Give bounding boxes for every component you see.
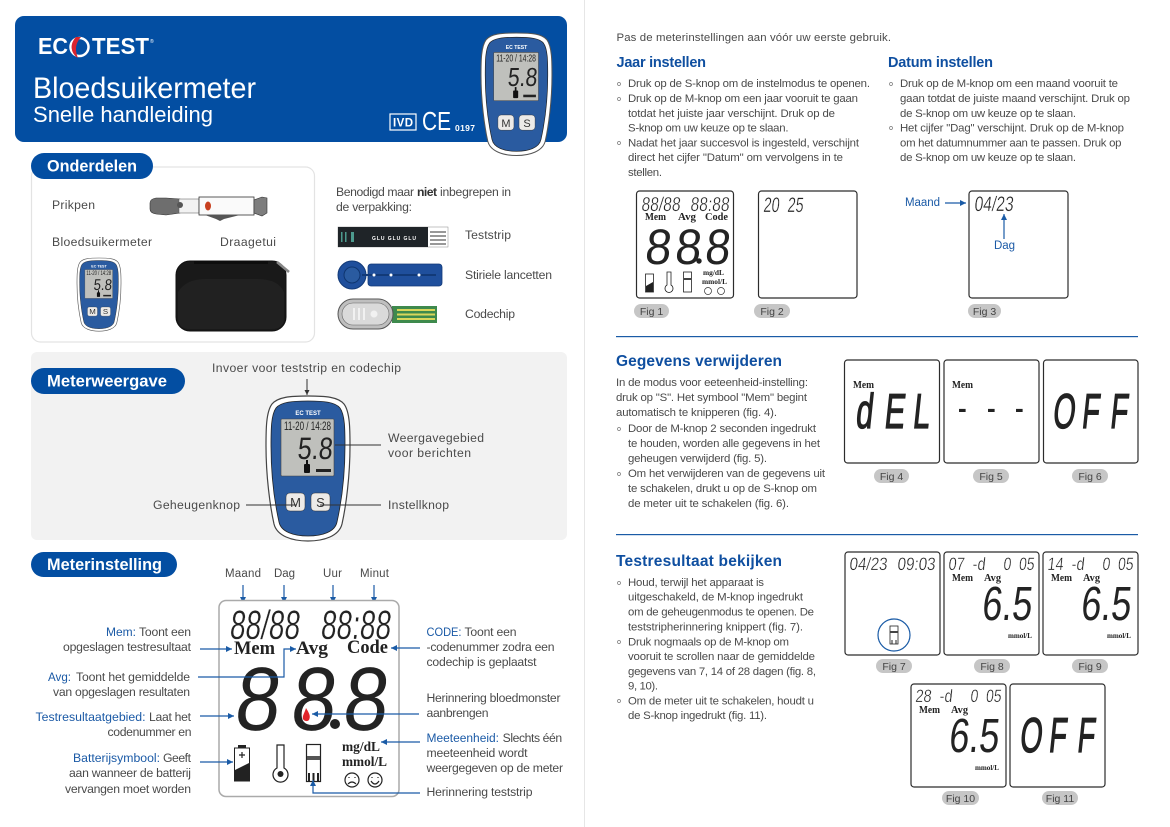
callout: meeteenheid: Slechts één: [503, 731, 562, 745]
meter illustration: EC TEST: [295, 411, 321, 417]
callout: batterijsymbool: vervangen moet worden: [65, 782, 191, 796]
figure 6: [1044, 360, 1138, 463]
icon: battery: [234, 745, 250, 781]
label: bloedsuikermeter: Bloedsuikermeter: [52, 235, 152, 249]
bullets: 9, 10).: [628, 680, 658, 692]
bullets: Druk nogmaals op de M-knop om: [628, 636, 789, 648]
paragraph: automatisch te knipperen (fig. 4).: [616, 407, 777, 419]
bullets: [618, 577, 816, 722]
bullets: datum instellen: Druk op de M-knop om een maand vooruit te: [900, 78, 1118, 90]
figure 4 label: [874, 469, 909, 483]
LCD units: mmol/L: [342, 754, 387, 769]
bullets: te schakelen, drukt u op de S-knop om: [628, 483, 817, 495]
callout: teststrip reminder: Herinnering teststrip: [426, 785, 533, 799]
meter illustration: [77, 258, 121, 331]
figure 9: Avg: [1083, 573, 1101, 584]
IVD mark: [390, 114, 416, 130]
callout: weergavegebied: [335, 431, 484, 460]
figure 6 label: [1072, 469, 1108, 483]
bullets: [618, 423, 826, 510]
figure 8 label: [974, 659, 1010, 673]
callout: meeteenheid: Meeteenheid:: [426, 731, 499, 745]
labels: date and time: Minut: [360, 568, 390, 580]
paragraph: In de modus voor eeteenheid-instelling:: [616, 377, 808, 389]
not-included intro text: inbegrepen in: [440, 185, 511, 199]
figure 8: 07 -d: [948, 554, 987, 574]
figure 5: ---: [958, 393, 1024, 423]
callout: avg: van opgeslagen resultaten: [53, 685, 190, 699]
bullets: jaar instellen: Druk op de S-knop om de instelmodus te openen.: [628, 78, 870, 90]
figure 7: 09:03: [897, 554, 937, 574]
icon: blood drop: [303, 708, 310, 721]
heading pill: meterweergave: [31, 368, 185, 394]
figure 4: dEL: [854, 384, 934, 439]
figure 4 label: Fig 4: [880, 471, 903, 483]
meter illustration: [266, 396, 350, 541]
figure 10: Avg: [951, 705, 969, 716]
label: strip port: Invoer voor teststrip en codechip: [212, 361, 401, 375]
LCD display diagram: [219, 600, 399, 796]
figure 1: Code: [705, 212, 728, 223]
callout: bloedmonster: aanbrengen: [426, 706, 488, 720]
figure 5 label: Fig 5: [979, 471, 1003, 483]
bullets: jaar instellen: totdat het juiste jaar verschijnt. Druk op de: [628, 108, 835, 120]
meter illustration: S: [103, 307, 108, 316]
bullets: de S-knop ingedrukt (fig. 11).: [628, 710, 767, 722]
figure 3: [969, 191, 1068, 298]
meter illustration: 5.8: [507, 62, 539, 92]
bullets: geheugen verwijderd (fig. 5).: [628, 453, 767, 465]
panel: meterweergave: [31, 352, 567, 541]
bullets: vooruit te scrollen naar de gemiddelde: [628, 651, 815, 663]
icon: lancets: [338, 261, 442, 289]
meter illustration: 11-20 / 14:28: [496, 54, 536, 65]
meter illustration: S: [316, 495, 325, 510]
figure 3: 04/23: [973, 193, 1015, 216]
bullets: datum instellen: de S-knop om uw keuze op te slaan.: [900, 152, 1076, 164]
labels: date and time: Maand: [225, 568, 261, 580]
icon: test strip reminder: [306, 744, 320, 782]
arrow: strip port: [306, 379, 308, 395]
logo: EC: [38, 33, 68, 59]
icon: code chip: [338, 299, 437, 329]
callout: batterijsymbool: [65, 751, 233, 796]
bullets: te houden, worden alle gegevens in het: [628, 438, 821, 450]
meter illustration: S: [523, 118, 531, 130]
figure 8: mmol/L: [1008, 632, 1032, 640]
figure 10: 6.5: [947, 709, 1003, 763]
figure 1: 88:88: [689, 194, 731, 216]
header banner: [15, 16, 567, 156]
callout: testresultaatgebied: Testresultaatgebied:: [36, 710, 146, 724]
logo: ®: [150, 38, 154, 45]
bullets: uitgeschakeld, de M-knop ingedrukt: [628, 592, 804, 604]
figure 8 label: Fig 8: [980, 661, 1004, 673]
icon: test strip: GLU GLU GLU: [372, 236, 416, 242]
LCD big digit: 8: [287, 649, 342, 750]
callout: weergavegebied: voor berichten: [388, 446, 471, 460]
callout: instellknop: Instellknop: [388, 498, 449, 512]
bullets: om de geheugenmodus te openen. De: [628, 606, 814, 618]
figure 9: [1043, 552, 1138, 655]
bullets: jaar instellen: direct het cijfer "Datum" om vervolgens in te: [628, 152, 843, 164]
meter illustration: EC TEST: [91, 265, 108, 269]
label: draagetui: Draagetui: [220, 235, 276, 249]
icon: test strip: [338, 227, 448, 247]
logo: TEST: [92, 33, 149, 59]
figure 7: 04/23: [849, 554, 889, 574]
section: meterinstelling: [31, 552, 563, 799]
callout: testresultaatgebied: codenummer en: [108, 725, 192, 739]
CE mark: 0197: [455, 123, 475, 133]
meter illustration: M: [290, 495, 301, 510]
figure 9: 0 05: [1102, 554, 1135, 574]
not-included intro text: niet: [417, 185, 437, 199]
bullets: datum instellen: gaan totdat de juiste maand verschijnt. Druk op: [900, 93, 1130, 105]
heading pill: meterinstelling: [31, 552, 177, 577]
callout: code: -codenummer zodra een: [426, 640, 554, 654]
figure 10: 28 -d: [915, 686, 954, 706]
callout: dag: Dag: [994, 240, 1015, 252]
figure 1: 8: [673, 219, 705, 275]
callout: bloedmonster: [312, 691, 560, 720]
bullets: jaar instellen: Druk op de M-knop om een jaar vooruit te gaan: [628, 93, 858, 105]
figure 11: OFF: [1018, 708, 1098, 763]
icon: carrying case: [176, 261, 289, 331]
section: jaar instellen: [616, 55, 870, 179]
bullets: Houd, terwijl het apparaat is: [628, 577, 764, 589]
figure 10 label: Fig 10: [946, 793, 975, 805]
bullets: de meter uit te schakelen (fig. 6).: [628, 498, 789, 510]
meter illustration: 5.8: [93, 277, 113, 294]
figure 9: Mem: [1051, 573, 1072, 584]
meter illustration: EC TEST: [506, 45, 528, 51]
CE mark: [422, 106, 475, 136]
callout: instellknop: [320, 498, 449, 512]
callout: meeteenheid: meeteenheid wordt: [426, 746, 528, 760]
figure 4: [844, 360, 940, 463]
figure 9 label: Fig 9: [1078, 661, 1102, 673]
callout: geheugenknop: Geheugenknop: [153, 498, 240, 512]
LCD word: Avg: Avg: [296, 638, 329, 659]
subtitle: Snelle handleiding: [33, 102, 213, 127]
figure 1: [636, 191, 734, 298]
figure 4: Mem: [853, 380, 874, 391]
figure 8: 6.5: [980, 577, 1036, 631]
heading pill: onderdelen: [31, 153, 153, 179]
LCD units: mg/dL: [342, 739, 380, 754]
figure 6: OFF: [1051, 384, 1131, 439]
paragraph: druk op "S". Het symbool "Mem" begint: [616, 392, 808, 404]
figure 3 label: Fig 3: [973, 306, 996, 318]
icon: sad and happy faces: [345, 773, 382, 787]
not-included intro text: Benodigd maar: [336, 185, 414, 199]
labels: date and time: Dag: [274, 568, 295, 580]
heading: testresultaat bekijken: Testresultaat bekijken: [616, 553, 782, 570]
heading: jaar instellen: Jaar instellen: [616, 55, 706, 71]
heading: datum instellen: Datum instellen: [888, 55, 993, 71]
callout: mem: [63, 625, 232, 654]
LCD units: [342, 739, 387, 769]
bullets: jaar instellen: [618, 78, 870, 179]
figure 8: Mem: [952, 573, 973, 584]
meter illustration: 5.8: [296, 431, 334, 466]
intro sentence: Pas de meterinstellingen aan vóór uw eerste gebruik.: [616, 32, 891, 44]
meter illustration: [481, 33, 552, 156]
logo: [38, 33, 154, 59]
figure 2: [758, 191, 857, 298]
bullets: datum instellen: Het cijfer "Dag" verschijnt. Druk op de M-knop: [900, 122, 1124, 134]
meter illustration: 11-20 / 14:28: [86, 270, 111, 277]
section: testresultaat bekijken: [616, 553, 816, 722]
callout: testresultaatgebied: [36, 710, 234, 739]
callout: avg: [48, 649, 296, 699]
figure 7 label: Fig 7: [882, 661, 906, 673]
figure 6 label: Fig 6: [1078, 471, 1102, 483]
bullets: Om het verwijderen van de gegevens uit: [628, 468, 826, 480]
bullets: datum instellen: [890, 78, 1130, 164]
labels: date and time: Uur: [323, 568, 342, 580]
figure 2 label: [754, 304, 790, 318]
figure 2: 20 25: [762, 194, 805, 217]
meter illustration: M: [89, 307, 96, 316]
figure 1: Avg: [678, 212, 697, 223]
callout: testresultaatgebied: Laat het: [149, 710, 192, 724]
figure 5 label: [973, 469, 1009, 483]
bullets: gegevens van 7, 14 of 28 dagen (fig. 8,: [628, 666, 816, 678]
LCD date digits: 88/88: [228, 602, 303, 648]
LCD word: Code: Code: [347, 637, 388, 658]
callout: weergavegebied: Weergavegebied: [388, 431, 484, 445]
callout: code: CODE:: [426, 625, 462, 639]
bullets: Om de meter uit te schakelen, houdt u: [628, 696, 814, 708]
figure 9 label: [1072, 659, 1108, 673]
callout: avg: Toont het gemiddelde: [76, 670, 190, 684]
labels: date and time: [225, 568, 390, 603]
callout: batterijsymbool: Batterijsymbool:: [73, 751, 160, 765]
IVD mark: IVD: [393, 118, 413, 130]
not-included intro text: de verpakking:: [336, 200, 412, 214]
figure 11: [1010, 684, 1105, 787]
figure 10: mmol/L: [975, 764, 999, 772]
not-included intro text: [336, 185, 511, 214]
section: datum instellen: [888, 55, 1130, 164]
figure 1 label: Fig 1: [640, 306, 663, 318]
heading pill: onderdelen: Onderdelen: [47, 156, 137, 176]
LCD big digit: 8: [231, 649, 286, 750]
label: prikpen: Prikpen: [52, 198, 95, 212]
bullets: jaar instellen: stellen.: [628, 167, 662, 179]
figure 5: Mem: [952, 380, 973, 391]
figure 7: [845, 552, 940, 655]
heading pill: meterinstelling: Meterinstelling: [47, 555, 162, 574]
callout: mem: Mem:: [106, 625, 136, 639]
LCD time digits: 88:88: [319, 602, 394, 648]
callout: dag: [994, 214, 1015, 252]
paragraph: [616, 377, 808, 419]
figure 9: 14 -d: [1047, 554, 1086, 574]
heading pill: meterweergave: Meterweergave: [47, 372, 167, 390]
title: Bloedsuikermeter: [33, 72, 256, 105]
LCD word: Mem: Mem: [234, 638, 275, 659]
callout: maand: [905, 197, 966, 209]
figure 3 label: [968, 304, 1001, 318]
LCD decimal point: [330, 719, 340, 729]
label: teststrip: Teststrip: [465, 228, 511, 242]
bullets: Door de M-knop 2 seconden ingedrukt: [628, 423, 817, 435]
label: codechip: Codechip: [465, 307, 515, 321]
figure 1: 8: [643, 219, 675, 275]
bullets: jaar instellen: S-knop om uw keuze op te slaan.: [628, 122, 788, 134]
bullets: teststripherinnering knippert (fig. 7).: [628, 622, 803, 634]
figure 8: [944, 552, 1039, 655]
callout: meeteenheid: weergegeven op de meter: [426, 761, 563, 775]
figure 1 label: [634, 304, 669, 318]
figure 10: Mem: [919, 705, 940, 716]
bullets: jaar instellen: Nadat het jaar succesvol is ingesteld, verschijnt: [628, 138, 860, 150]
callout: mem: opgeslagen testresultaat: [63, 640, 192, 654]
figure 1: 88/88: [640, 194, 682, 216]
figure 10: [911, 684, 1006, 787]
heading: gegevens verwijderen: Gegevens verwijderen: [616, 353, 782, 370]
bullets: datum instellen: de S-knop om uw keuze op te slaan.: [900, 108, 1076, 120]
figure 1: Mem: [645, 212, 666, 223]
callout: mem: Toont een: [139, 625, 191, 639]
LCD big digit: 8: [339, 649, 394, 750]
callout: batterijsymbool: Geeft: [163, 751, 192, 765]
figure 1: mmol/L: [702, 277, 727, 286]
callout: code: [391, 625, 554, 669]
icon: lancing device: [150, 197, 267, 221]
figure 8: 0 05: [1003, 554, 1036, 574]
bullets: datum instellen: om het datumnummer aan te passen. Druk op: [900, 138, 1122, 150]
figure 2 label: Fig 2: [760, 306, 784, 318]
figure 10 label: [942, 791, 979, 805]
callout: maand: Maand: [905, 197, 940, 209]
CE mark: CE: [422, 106, 451, 136]
callout: teststrip reminder: [313, 780, 533, 799]
figure 7 label: [876, 659, 912, 673]
figure 8: Avg: [984, 573, 1002, 584]
panel: onderdelen: [31, 153, 314, 342]
label: lancetten: Stiriele lancetten: [465, 268, 552, 282]
meter illustration: M: [501, 118, 510, 130]
callout: meeteenheid: [381, 731, 563, 775]
callout: code: Toont een: [464, 625, 516, 639]
figure 9: 6.5: [1079, 577, 1135, 631]
figure 1: mg/dL: [703, 268, 724, 277]
meter illustration: 11-20 / 14:28: [284, 419, 331, 433]
callout: avg: Avg:: [48, 670, 71, 684]
callout: bloedmonster: Herinnering bloedmonster: [426, 691, 560, 705]
callout: code: codechip is geplaatst: [426, 655, 537, 669]
figure 5: [944, 360, 1039, 463]
figure 1: 8: [703, 219, 734, 275]
figure 11 label: [1042, 791, 1078, 805]
figure 11 label: Fig 11: [1046, 793, 1074, 805]
figure 9: mmol/L: [1107, 632, 1131, 640]
figure 10: 0 05: [970, 686, 1003, 706]
section: gegevens verwijderen: [616, 353, 826, 510]
icon: thermometer: [273, 745, 288, 782]
callout: batterijsymbool: aan wanneer de batterij: [69, 766, 191, 780]
